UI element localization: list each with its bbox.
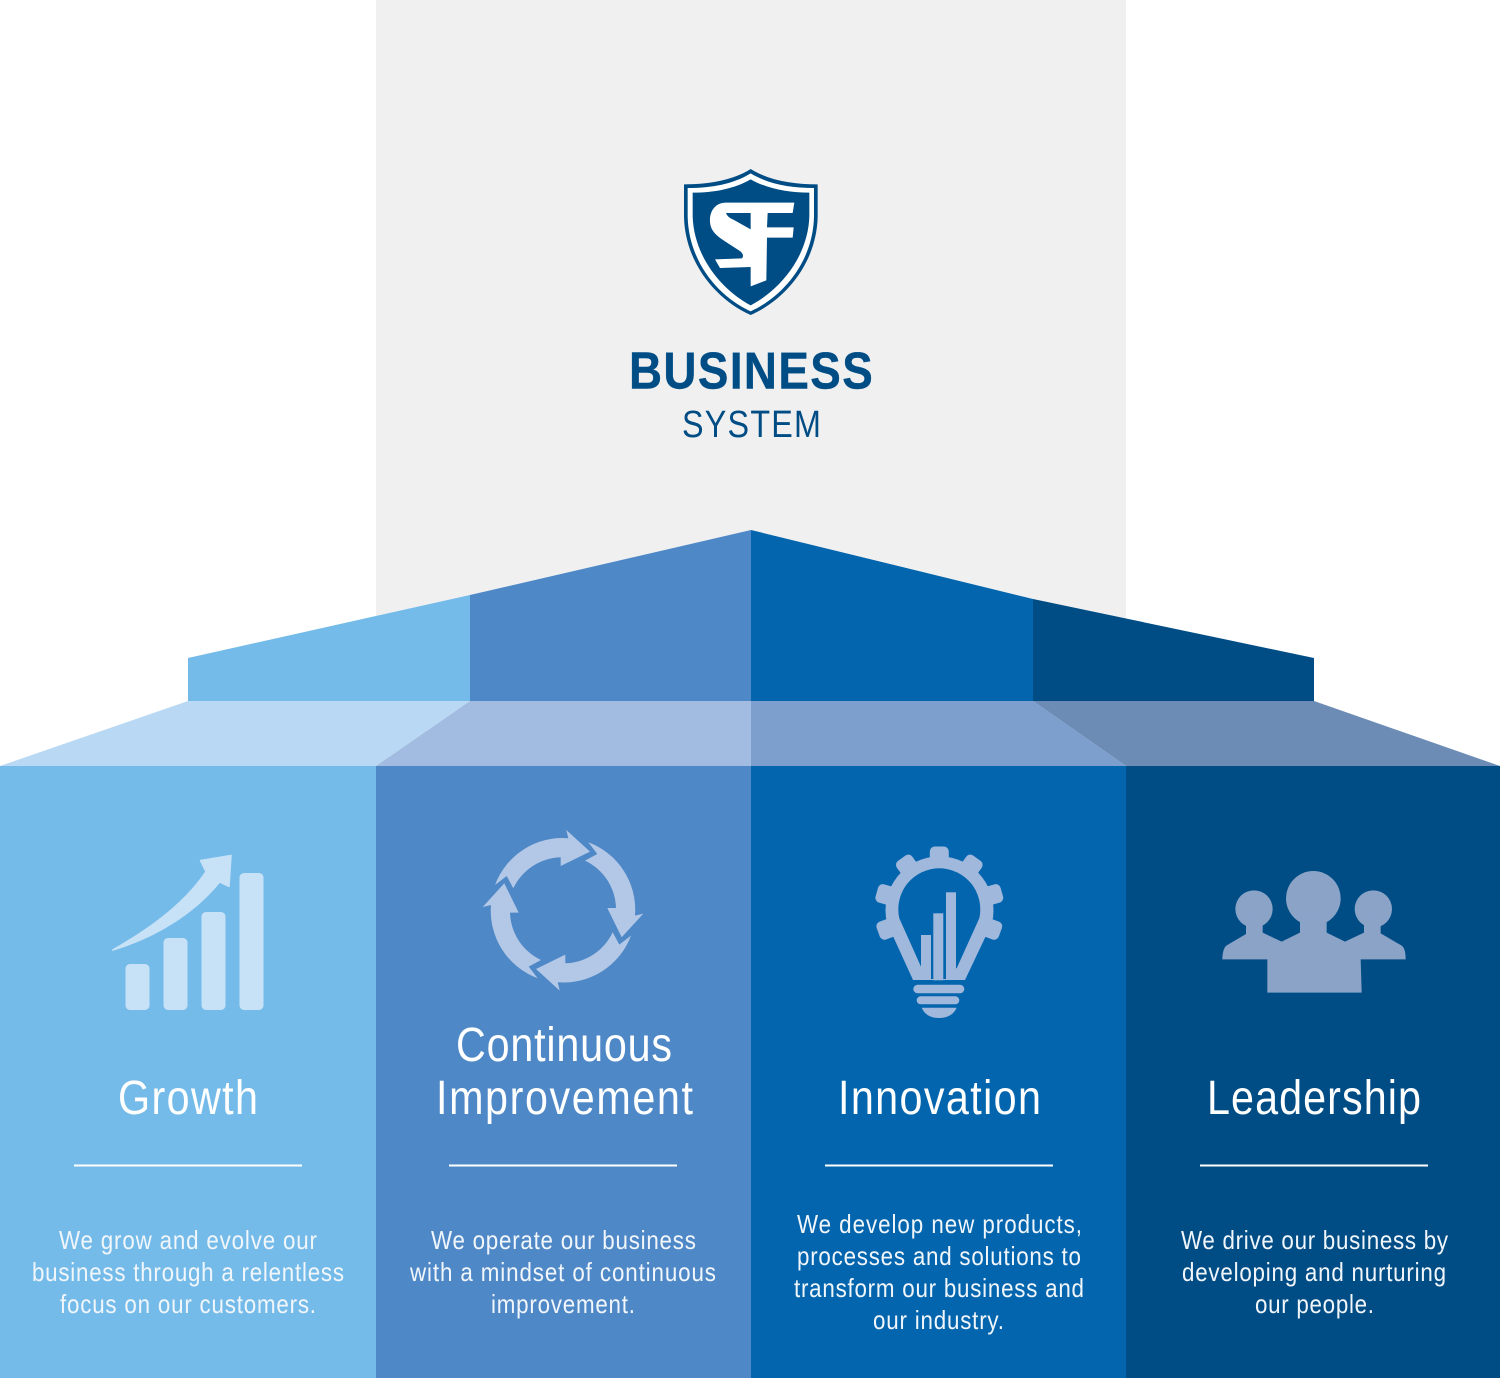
text: innovation: processes and solutions to <box>797 1242 1081 1271</box>
icon: three people <box>1222 871 1406 993</box>
text: leadership <box>1181 1226 1449 1319</box>
panel: growth <box>0 766 376 1378</box>
title <box>629 343 873 446</box>
heading: continuous improvement: Continuous <box>456 1018 672 1072</box>
text: growth: focus on our customers. <box>60 1290 316 1319</box>
text: innovation: We develop new products, <box>797 1210 1082 1239</box>
text: innovation <box>794 1210 1084 1335</box>
heading: leadership: Leadership <box>1207 1071 1421 1125</box>
heading: growth: Growth <box>118 1071 258 1125</box>
heading: innovation: Innovation <box>838 1071 1041 1125</box>
text: continuous improvement: We operate our business <box>431 1226 696 1255</box>
backdrop panel <box>376 0 1126 640</box>
panel fill: continuous improvement <box>376 766 751 1378</box>
text: continuous improvement: with a mindset of continuous <box>409 1258 716 1287</box>
heading: continuous improvement: Improvement <box>436 1071 693 1125</box>
text: leadership: developing and nurturing <box>1182 1258 1446 1287</box>
text: growth: business through a relentless <box>32 1258 344 1287</box>
icon: gear light bulb <box>874 846 1004 1018</box>
text: leadership: We drive our business by <box>1181 1226 1449 1255</box>
panel: continuous improvement <box>376 766 751 1378</box>
logo: shield <box>684 169 818 315</box>
panel: leadership <box>1126 766 1500 1378</box>
text: innovation: our industry. <box>873 1306 1004 1335</box>
text: leadership: our people. <box>1255 1290 1374 1319</box>
roof: upper tier <box>188 530 1314 701</box>
text: growth: We grow and evolve our <box>59 1226 317 1255</box>
icon: rising bar chart <box>113 856 264 1010</box>
panel fill: innovation <box>751 766 1126 1378</box>
icon: cycle arrows <box>483 830 643 991</box>
roof: lower tier <box>0 701 1500 766</box>
text: continuous improvement <box>409 1226 716 1319</box>
text: growth <box>32 1226 344 1319</box>
panel: innovation <box>751 766 1126 1378</box>
text: innovation: transform our business and <box>794 1274 1084 1303</box>
heading: continuous improvement <box>436 1018 693 1125</box>
panel fill: leadership <box>1126 766 1500 1378</box>
title line: system: SYSTEM <box>682 404 821 446</box>
panel fill: growth <box>0 766 376 1378</box>
title line: business: BUSINESS <box>629 343 873 400</box>
text: continuous improvement: improvement. <box>491 1290 635 1319</box>
